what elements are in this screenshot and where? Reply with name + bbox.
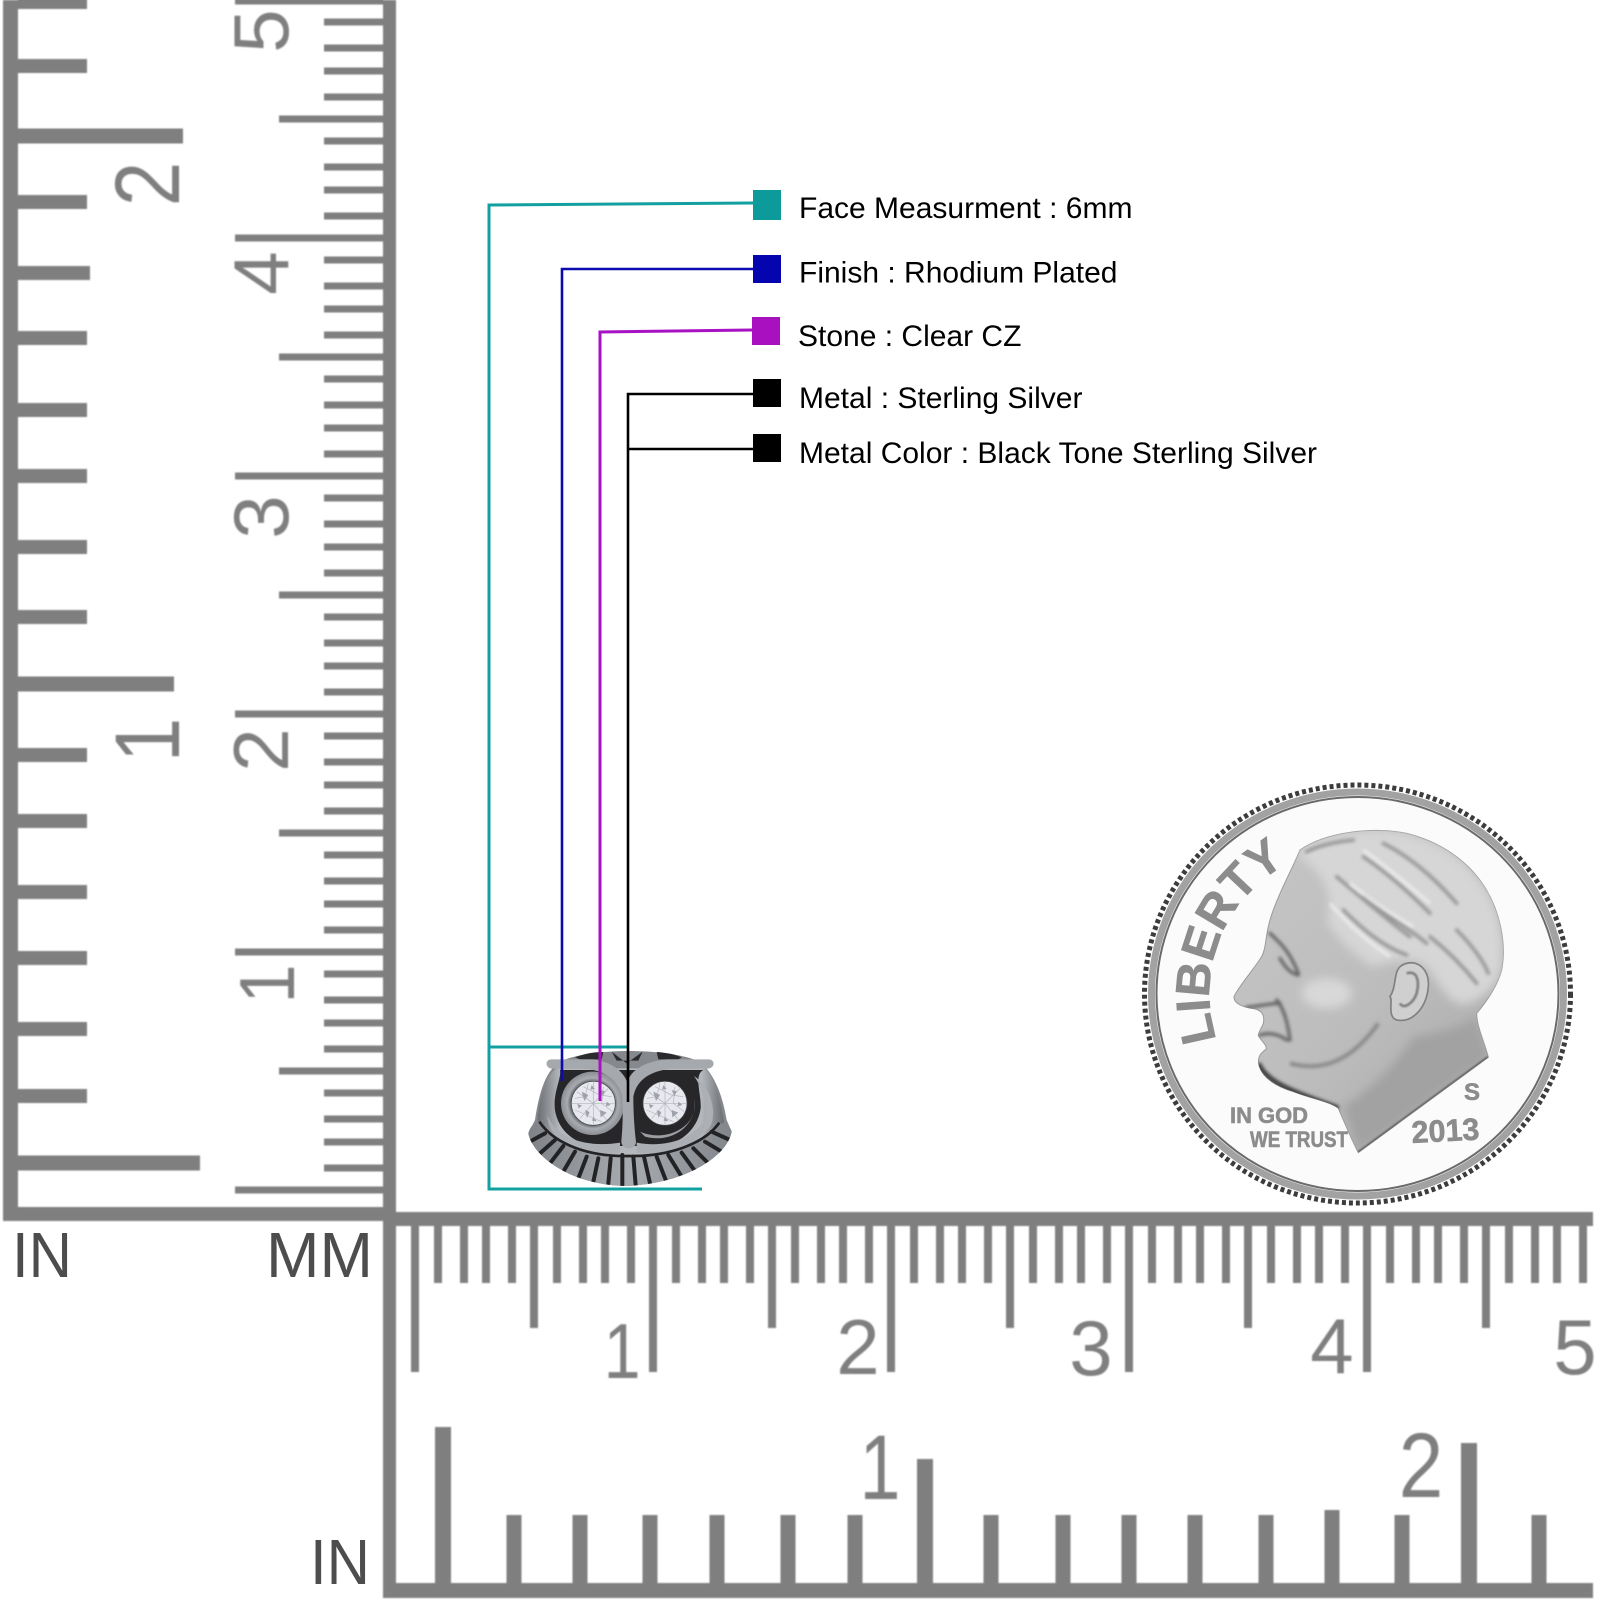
head interior shading — [1247, 831, 1503, 1153]
bracket: finish — [562, 255, 1118, 1081]
millimetre mid and long ticks — [415, 1226, 1486, 1372]
inch numerals — [860, 1415, 1443, 1519]
dark shadow around the eyes — [555, 1070, 703, 1146]
dome filigree — [575, 1052, 682, 1063]
black swatch: metal — [753, 379, 781, 407]
unit label: IN bottom: IN — [310, 1526, 370, 1598]
inch numerals: 1 — [97, 718, 199, 762]
purple swatch — [752, 317, 780, 345]
millimetre numerals: 1 — [224, 964, 311, 1004]
right ring highlight — [640, 1098, 695, 1138]
head silhouette — [1234, 831, 1503, 1153]
millimetre numerals: 2 — [217, 728, 305, 772]
Roosevelt profile — [1234, 831, 1503, 1153]
inch major ticks — [18, 136, 200, 1163]
inch ticks — [18, 2, 90, 1096]
black leader line — [628, 394, 753, 1102]
side panels — [537, 1068, 724, 1155]
inch major ticks — [443, 1427, 1469, 1583]
hair highlights — [1330, 850, 1430, 957]
hair strands — [1307, 840, 1488, 983]
millimetre numerals: 5 — [1553, 1303, 1597, 1391]
ruler frame — [383, 1212, 1593, 1598]
purple leader line — [600, 330, 752, 1101]
millimetre numerals: 4 — [1310, 1302, 1354, 1390]
label: metal: Metal : Sterling Silver — [799, 382, 1082, 415]
left eye ring — [561, 1072, 624, 1135]
inch numerals: 2 — [1399, 1415, 1443, 1517]
coin inner line — [1156, 797, 1558, 1191]
eye and nose shadows — [1247, 933, 1298, 1040]
millimetre short ticks — [438, 1226, 1583, 1283]
millimetre short ticks — [324, 22, 383, 1168]
millimetre mid and long ticks — [235, 1, 383, 1190]
owl stud earring — [528, 1051, 732, 1186]
right lower crescent — [637, 1115, 708, 1154]
coin text: IN GOD: IN GOD — [1230, 1103, 1308, 1128]
cheek fold — [1290, 1023, 1378, 1066]
left stone — [571, 1081, 615, 1125]
band shadow — [539, 1122, 719, 1156]
feather grooves — [532, 1132, 730, 1185]
hair mass — [1300, 831, 1503, 1005]
unit label: IN left: IN — [12, 1219, 72, 1291]
inch numerals: 2 — [97, 162, 199, 206]
ear — [1390, 963, 1428, 1020]
cheek highlight — [1302, 978, 1352, 1008]
owl body — [528, 1051, 732, 1186]
groove strokes — [532, 1132, 730, 1185]
inch numerals — [97, 162, 199, 762]
blue leader line — [562, 269, 753, 1081]
label: stone: Stone : Clear CZ — [798, 320, 1021, 353]
unit label: MM: MM — [266, 1219, 373, 1291]
jaw shadow — [1258, 1063, 1338, 1108]
neck shading — [1343, 1017, 1488, 1153]
inch ticks — [514, 1510, 1539, 1583]
ruler frame — [3, 0, 396, 1221]
bracket: stone — [600, 317, 1021, 1101]
dime coin — [1142, 782, 1573, 1206]
millimetre numerals: 4 — [217, 251, 305, 295]
black swatch: metal color — [753, 434, 781, 462]
coin text: mint mark: S — [1464, 1079, 1480, 1106]
neck cut edge — [1358, 1057, 1488, 1153]
millimetre numerals: 2 — [836, 1303, 880, 1391]
blue swatch — [753, 255, 781, 283]
inch numerals: 1 — [860, 1416, 900, 1519]
feather band — [528, 1122, 732, 1186]
coin reeded edge — [1144, 785, 1570, 1203]
brows and beak — [547, 1059, 714, 1148]
bracket: face measurement — [489, 190, 1132, 1189]
millimetre numerals: 3 — [1069, 1304, 1113, 1392]
teal leader line — [489, 203, 753, 1189]
millimetre numerals: 3 — [217, 495, 305, 539]
right side crescent — [694, 1076, 713, 1132]
millimetre numerals — [604, 1302, 1597, 1395]
coin text: LIBERTY: LIBERTY — [1176, 836, 1276, 1044]
millimetre numerals: 5 — [217, 9, 305, 53]
label: face measurement: Face Measurment : 6mm — [799, 192, 1132, 225]
bracket: metal — [628, 379, 1317, 1102]
teal swatch — [753, 190, 781, 220]
millimetre numerals — [217, 9, 311, 1004]
horizontal ruler — [383, 1212, 1597, 1598]
coin rim — [1152, 792, 1564, 1196]
coin text: WE TRUST: WE TRUST — [1250, 1127, 1348, 1152]
coin text: year: 2013 — [1411, 1111, 1480, 1150]
vertical ruler — [3, 0, 396, 1221]
ear inner — [1400, 973, 1418, 1006]
right stone — [643, 1081, 687, 1125]
label: metal color: Metal Color : Black Tone Sterling Silver — [799, 437, 1317, 470]
millimetre numerals: 1 — [604, 1308, 640, 1395]
left lower crescent — [547, 1115, 620, 1154]
label: finish: Finish : Rhodium Plated — [799, 256, 1118, 290]
